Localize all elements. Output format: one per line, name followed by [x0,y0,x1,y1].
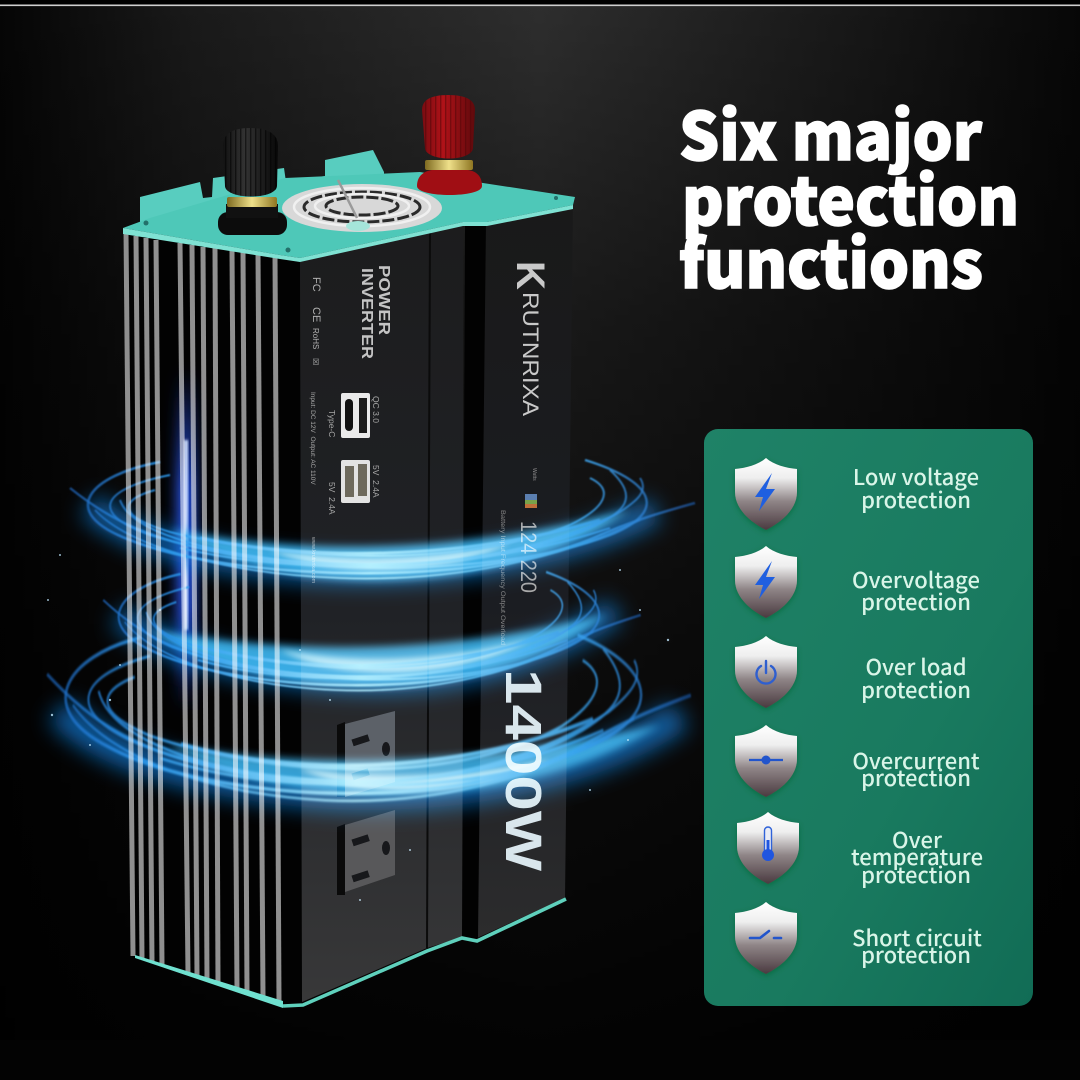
port labels: www.krutnrixa.com [310,536,316,584]
title: Six major [679,84,982,180]
POWER INVERTER label [358,265,392,359]
bottom teal edge [283,899,566,1006]
AC outlets [337,711,395,895]
port labels: QC 3.0 [371,396,381,423]
label [852,563,980,617]
label: protection [861,483,971,515]
label: protection [861,761,971,793]
port labels: 5V 2.4A [327,482,337,515]
icon: fuse shield [735,725,797,797]
item: low voltage protection [735,458,979,530]
star particles [47,554,669,901]
label [851,823,983,890]
label: Over [892,823,943,855]
label: Overvoltage [852,563,980,595]
label: Low voltage [853,460,979,492]
bright band: bottom ring [170,725,660,795]
item: over temperature protection [737,812,983,890]
port labels: Type-C [327,410,337,437]
label: protection [861,673,971,705]
label: Overcurrent [852,744,980,776]
icon: lightning shield [735,546,797,618]
title: functions [679,212,983,308]
port labels: 5V 2.4A [371,465,381,498]
label [852,744,980,793]
bright band: middle ring [150,615,605,687]
item: overvoltage protection [735,546,980,618]
dual USB port [341,460,370,503]
display readout: 124 220 [516,521,541,593]
certification marks: RoHS [311,328,320,349]
display readout [499,468,541,645]
black negative terminal [218,128,287,235]
port labels [309,392,381,584]
red positive terminal [417,95,482,195]
power inverter product [123,95,575,1008]
brand logo text [508,261,552,416]
label: Over load [865,650,967,682]
label: temperature [851,840,983,872]
panel: protection functions [704,429,1033,1006]
icon: thermometer shield [737,812,799,884]
vertical streak core [184,440,188,630]
teal top plate [123,150,575,262]
label [861,650,971,705]
ring lines top [70,460,695,578]
1400W label: 1400W [495,669,552,872]
seam line [427,232,430,948]
title: protection [682,149,1019,245]
brand logo text: RUTNRIXA [518,292,543,416]
right face [477,203,573,938]
display readout: Watts [531,468,537,481]
port labels: Input: DC 12V Output: AC 110V [309,392,316,485]
icon: switch shield [735,902,797,974]
item: short circuit protection [735,902,982,974]
ring lines middle [103,572,641,690]
brand logo text: K [508,261,552,290]
fin side of the inverter [123,232,302,1008]
POWER INVERTER label: POWER [375,265,392,336]
label: Short circuit [852,921,982,953]
certification marks: ☒ [311,358,320,365]
blue energy swirl rings [47,370,695,901]
certification marks [310,277,322,365]
label: protection [861,858,971,890]
display readout: Battery Input Frequency Output Overload [499,510,505,645]
front face [300,222,463,1002]
certification marks: CE [310,307,322,322]
label: protection [861,938,971,970]
dark channel between faces [462,220,486,938]
label [852,921,982,970]
certification marks: FC [310,277,322,292]
item: overcurrent protection [735,725,980,797]
soft glow behind rings [60,505,680,795]
band highlights [270,543,550,791]
bright band: top ring [170,510,630,580]
POWER INVERTER label: INVERTER [358,268,375,359]
icon: power shield [735,636,797,708]
ring lines bottom [47,635,691,801]
label [853,460,979,515]
icon: lightning shield [735,458,797,530]
Type-C and QC port [341,393,370,438]
title [679,84,1019,308]
label: protection [861,585,971,617]
item: over load protection [735,636,971,708]
vertical light streak [178,370,194,710]
cooling fan [282,180,442,232]
